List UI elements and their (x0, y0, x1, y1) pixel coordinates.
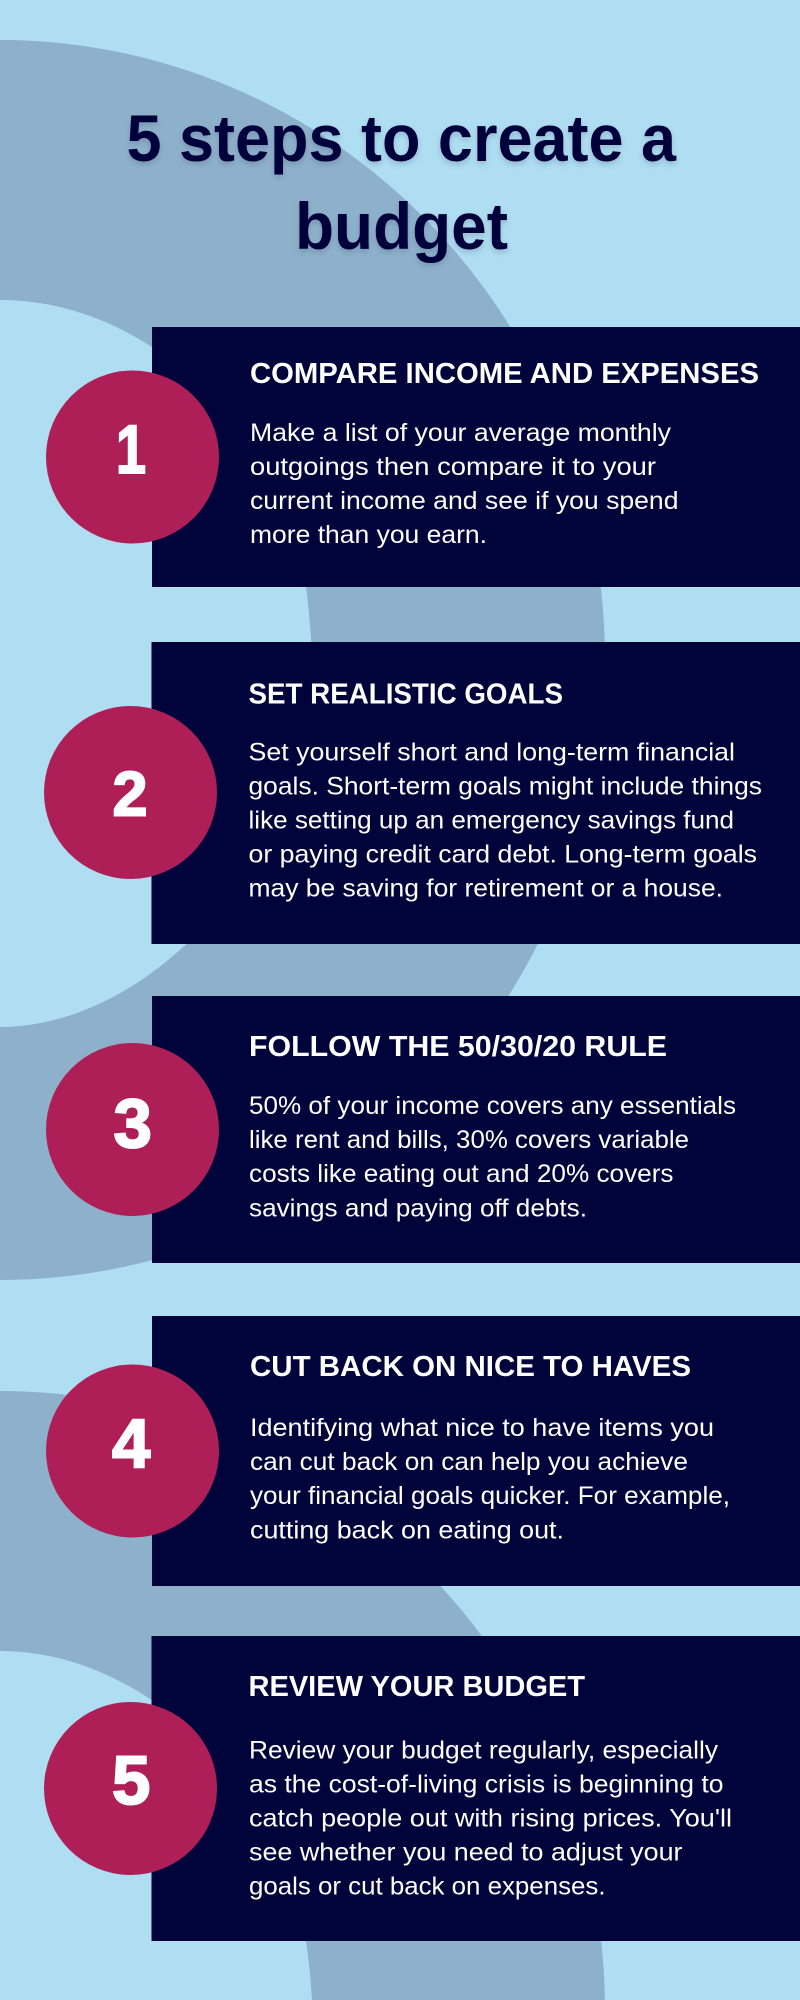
body text 2: like setting up an emergency savings fund (248, 807, 734, 835)
number badge 3 (46, 1043, 219, 1216)
decorative ring: lower (0, 1391, 605, 2000)
heading 3: FOLLOW THE 50/30/20 RULE (249, 1031, 667, 1063)
body text 2: may be saving for retirement or a house. (248, 875, 723, 903)
panel: step 1 (46, 327, 800, 587)
body text 1: Make a list of your average monthly (250, 419, 672, 447)
number badge 2: 2 (112, 760, 148, 830)
body text 4 (250, 1414, 730, 1544)
body text 5: Review your budget regularly, especially (249, 1736, 719, 1764)
body text 4: can cut back on can help you achieve (250, 1448, 688, 1476)
body text 3: like rent and bills, 30% covers variable (249, 1126, 689, 1154)
body text 4: your financial goals quicker. For example, (250, 1482, 730, 1510)
panel: step 5 (44, 1636, 800, 1941)
panel: step 3 (46, 996, 800, 1263)
heading 2: SET REALISTIC GOALS (248, 678, 563, 710)
body text 3: costs like eating out and 20% covers (249, 1160, 674, 1188)
body text 2: goals. Short-term goals might include things (248, 773, 762, 801)
decorative ring: upper (0, 40, 605, 1280)
body text 5 (249, 1736, 732, 1900)
body text 5: catch people out with rising prices. You'll (249, 1804, 732, 1832)
body text 3: savings and paying off debts. (249, 1194, 587, 1222)
heading 4: CUT BACK ON NICE TO HAVES (250, 1351, 691, 1383)
number badge 5 (44, 1702, 217, 1875)
number badge 4 (46, 1364, 219, 1538)
heading 5: REVIEW YOUR BUDGET (248, 1671, 585, 1703)
title: budget (295, 189, 508, 263)
card background 5 (152, 1636, 800, 1941)
title (126, 101, 677, 263)
title: 5 steps to create a (126, 101, 677, 175)
number badge 1: 1 (116, 411, 146, 488)
body text 5: goals or cut back on expenses. (249, 1872, 606, 1900)
body text 2: or paying credit card debt. Long-term goals (248, 841, 757, 869)
number badge 4: 4 (112, 1405, 150, 1482)
body text 1: more than you earn. (250, 521, 487, 549)
body text 5: see whether you need to adjust your (249, 1838, 682, 1866)
number badge 3: 3 (114, 1085, 152, 1162)
panel: step 2 (44, 642, 800, 944)
body text 5: as the cost-of-living crisis is beginning to (249, 1770, 724, 1798)
body text 3 (249, 1092, 736, 1222)
panel: step 4 (46, 1316, 800, 1586)
number badge 5: 5 (112, 1742, 150, 1819)
body text 1: outgoings then compare it to your (250, 453, 656, 481)
body text 2: Set yourself short and long-term financial (248, 739, 735, 767)
card background 1 (152, 327, 800, 587)
number badge 1 (46, 370, 219, 544)
body text 3: 50% of your income covers any essentials (249, 1092, 736, 1120)
number badge 2 (44, 706, 217, 879)
body text 1: current income and see if you spend (250, 487, 678, 515)
card background 3 (152, 996, 800, 1263)
body text 2 (248, 739, 762, 903)
card background 4 (152, 1316, 800, 1586)
card background 2 (152, 642, 800, 944)
body text 1 (250, 419, 678, 549)
heading 1: COMPARE INCOME AND EXPENSES (250, 358, 759, 390)
body text 4: Identifying what nice to have items you (250, 1414, 714, 1442)
body text 4: cutting back on eating out. (250, 1516, 564, 1544)
